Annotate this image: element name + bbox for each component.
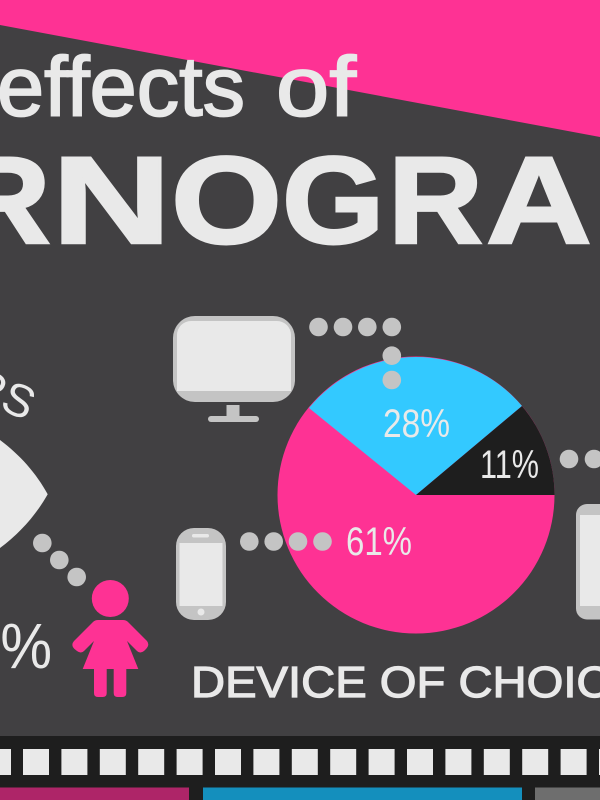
label: 28 percent: 28% <box>383 402 450 446</box>
panel: crimson frame <box>0 788 189 800</box>
panel: blue frame <box>203 788 522 800</box>
heading: device of choice: DEVICE OF CHOICE <box>191 658 600 707</box>
film strip <box>0 736 600 800</box>
icon: eye shape <box>0 440 48 548</box>
dotted connector: phone to pie <box>240 532 332 551</box>
pie chart: device of choice <box>278 356 554 634</box>
title: pornography: N <box>52 132 171 270</box>
pink corner banner <box>0 0 600 137</box>
icon: desktop monitor <box>173 316 295 422</box>
icon: girl <box>72 580 148 697</box>
title: pornography: R <box>388 132 483 270</box>
title: effects of: of <box>276 40 357 134</box>
label: 61 percent: 61% <box>346 520 412 564</box>
title: effects of: effects <box>0 40 245 134</box>
icon: tablet <box>576 504 600 620</box>
dotted connector: monitor to pie <box>309 318 401 389</box>
panel: gray frame <box>535 788 600 800</box>
title: pornography: G <box>282 132 384 270</box>
title: pornography <box>0 132 592 270</box>
dotted connector: tablet to pie <box>560 450 600 468</box>
label: 11 percent: 11% <box>480 443 539 487</box>
icon: smartphone <box>176 528 226 620</box>
title: pornography: O <box>171 132 282 270</box>
dotted connector: eye to girl <box>33 534 86 586</box>
title: pornography: A <box>486 132 592 270</box>
